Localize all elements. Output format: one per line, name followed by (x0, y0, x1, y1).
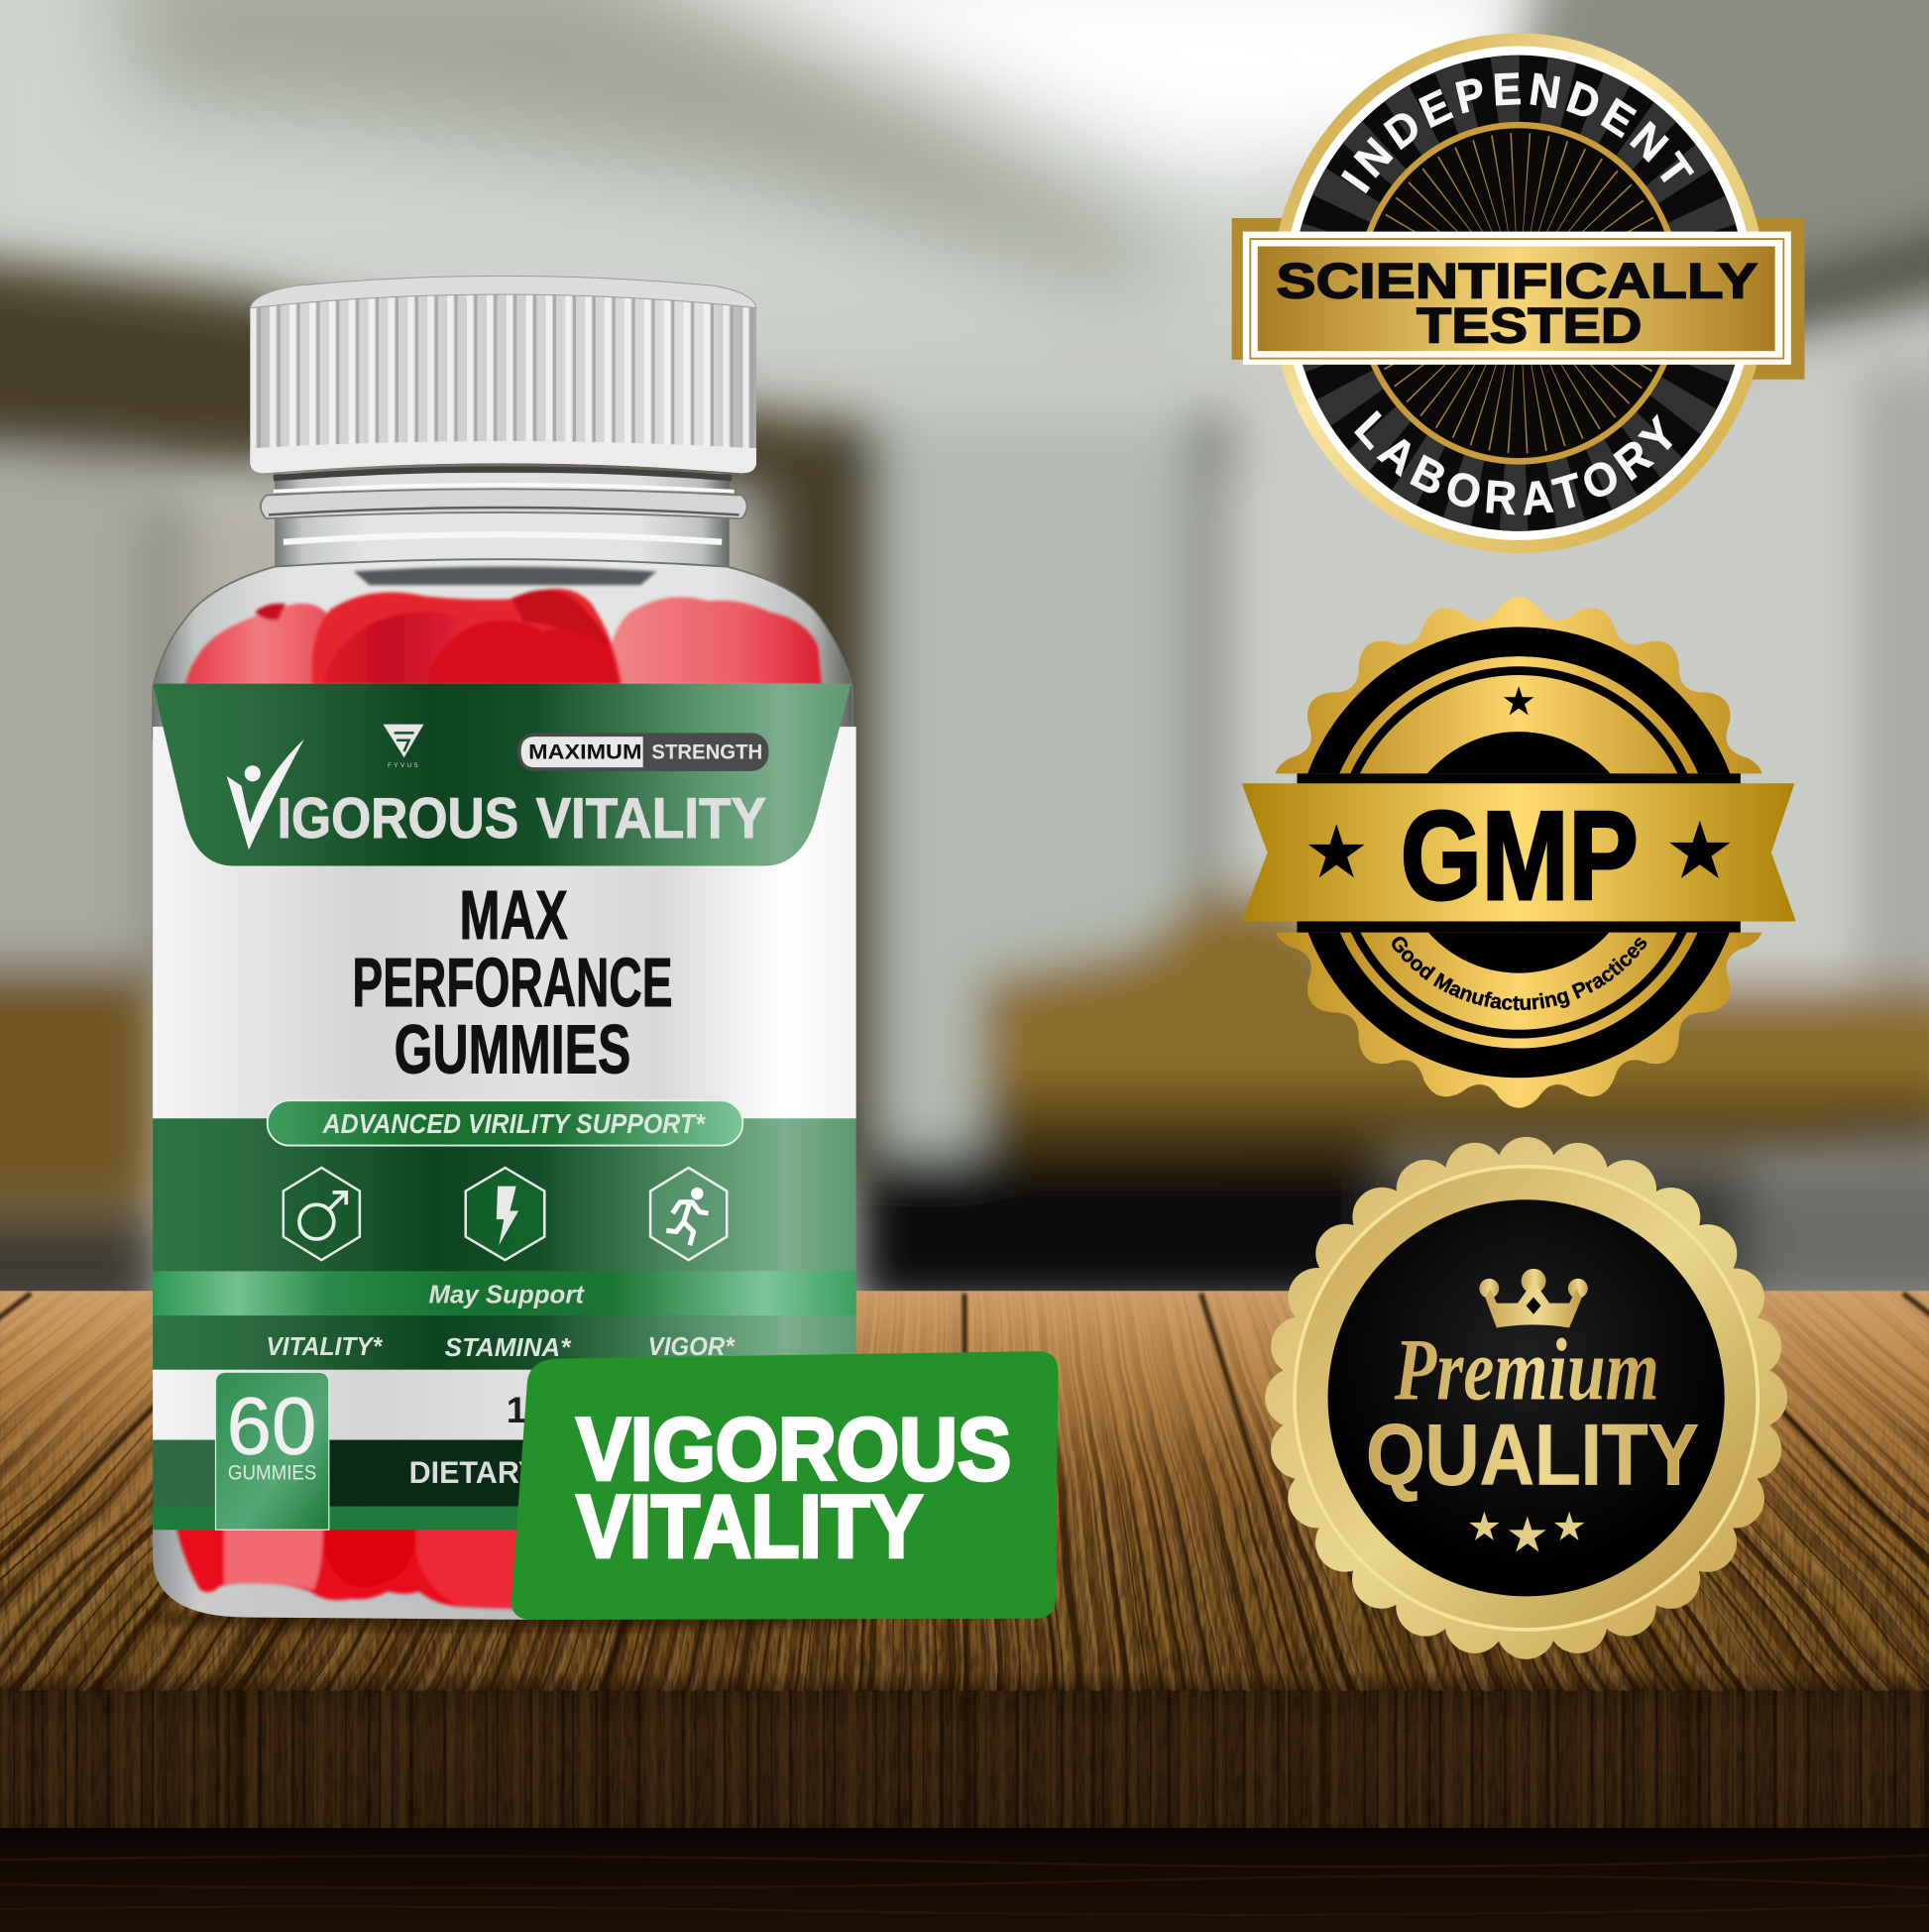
plank seams (0, 1294, 1929, 1828)
front face streaks (0, 1703, 1929, 1814)
jar bottom (153, 1522, 542, 1620)
badge: premium quality (1284, 1156, 1768, 1641)
brand check logo (227, 739, 304, 850)
laboratory arc text: LABORATORY (1354, 410, 1673, 515)
product name: PERFORANCE (352, 944, 673, 1021)
product name: GUMMIES (395, 1010, 630, 1087)
black center (1328, 1199, 1725, 1596)
benefit words: VIGOR* (648, 1331, 736, 1361)
dark dietary panel (153, 1440, 856, 1507)
ribbon: SCIENTIFICALLY (1276, 254, 1758, 309)
brand name on label: IGOROUS (278, 787, 518, 851)
icon: male symbol hexagon (284, 1168, 360, 1260)
ribbon: TESTED (1417, 297, 1642, 353)
may support band: May Support (428, 1280, 585, 1309)
perspective wood grain (0, 1291, 1929, 1691)
glass neck (261, 469, 747, 569)
wooden table (0, 1291, 1929, 1932)
table lower dark base (0, 1828, 1929, 1932)
fine pores (0, 1380, 1929, 1828)
brand name on label (278, 787, 766, 851)
may support band (153, 1271, 856, 1315)
maximum strength pill (517, 733, 768, 771)
scalloped gold seal (1263, 597, 1774, 1108)
gold inner ring (1295, 1167, 1758, 1630)
icon: runner hexagon (650, 1168, 727, 1260)
badge: GMP (1241, 597, 1796, 1108)
small FYVUS logo (383, 725, 424, 769)
gold ribbon (1242, 783, 1796, 921)
table top planks (0, 1291, 1929, 1691)
label lower green section (153, 1118, 856, 1370)
maximum strength pill: MAXIMUM (528, 740, 641, 763)
soft contact shadow (142, 1608, 868, 1630)
black bars by ribbon (1297, 773, 1741, 933)
advanced virility pill (268, 1100, 742, 1146)
good manufacturing practices arc text: Good Manufacturing Practices (1392, 936, 1647, 1011)
60 gummies badge (216, 1372, 329, 1530)
maximum strength pill: STRENGTH (651, 740, 762, 763)
brand name on label: VITALITY (536, 787, 766, 851)
benefit words: VITALITY* (266, 1331, 384, 1361)
60 gummies badge: 60 (227, 1381, 316, 1471)
label green foot (153, 1507, 856, 1530)
ribbon (1243, 232, 1791, 365)
premium script: Premium (1394, 1321, 1659, 1420)
white strip (153, 1370, 856, 1440)
gummies top (184, 567, 822, 685)
advanced virility pill: ADVANCED VIRILITY SUPPORT* (322, 1108, 706, 1139)
gummies bottom (176, 1528, 523, 1609)
base faint grain (0, 1855, 1929, 1915)
round seal (1279, 34, 1759, 553)
green brand sticker: VITALITY (577, 1477, 923, 1576)
label top green banner (153, 684, 851, 866)
icon: lightning hexagon (466, 1168, 544, 1260)
three stars (1469, 1512, 1584, 1552)
glass jar shoulders (153, 559, 852, 739)
ribbon back tabs (1232, 218, 1804, 380)
60 gummies badge: GUMMIES (228, 1461, 316, 1484)
benefit words (266, 1331, 736, 1362)
label white body (153, 727, 856, 1121)
right ribbon star (1669, 821, 1731, 878)
badge: scientifically tested (1231, 34, 1804, 553)
green brand sticker (511, 1351, 1058, 1620)
benefit words: STAMINA* (445, 1332, 572, 1362)
product name: MAX (460, 876, 568, 954)
GMP text: GMP (1401, 785, 1639, 926)
left ribbon star (1308, 824, 1365, 877)
background: blurred room (0, 0, 1929, 1324)
independent arc text: INDEPENDENT (1340, 72, 1695, 194)
bottle cap (250, 276, 756, 473)
quality text: QUALITY (1366, 1407, 1699, 1503)
top star (1504, 686, 1534, 715)
small FYVUS logo: FYVUS (388, 762, 420, 769)
white strip: 10 (507, 1389, 547, 1430)
crown (1479, 1269, 1588, 1328)
green brand sticker: VIGOROUS (577, 1399, 1011, 1498)
product bottle (142, 276, 868, 1630)
table front face (0, 1690, 1929, 1828)
product name (352, 876, 673, 1087)
dark dietary panel: DIETARY (409, 1455, 538, 1490)
scalloped outer edge (1284, 1156, 1768, 1641)
